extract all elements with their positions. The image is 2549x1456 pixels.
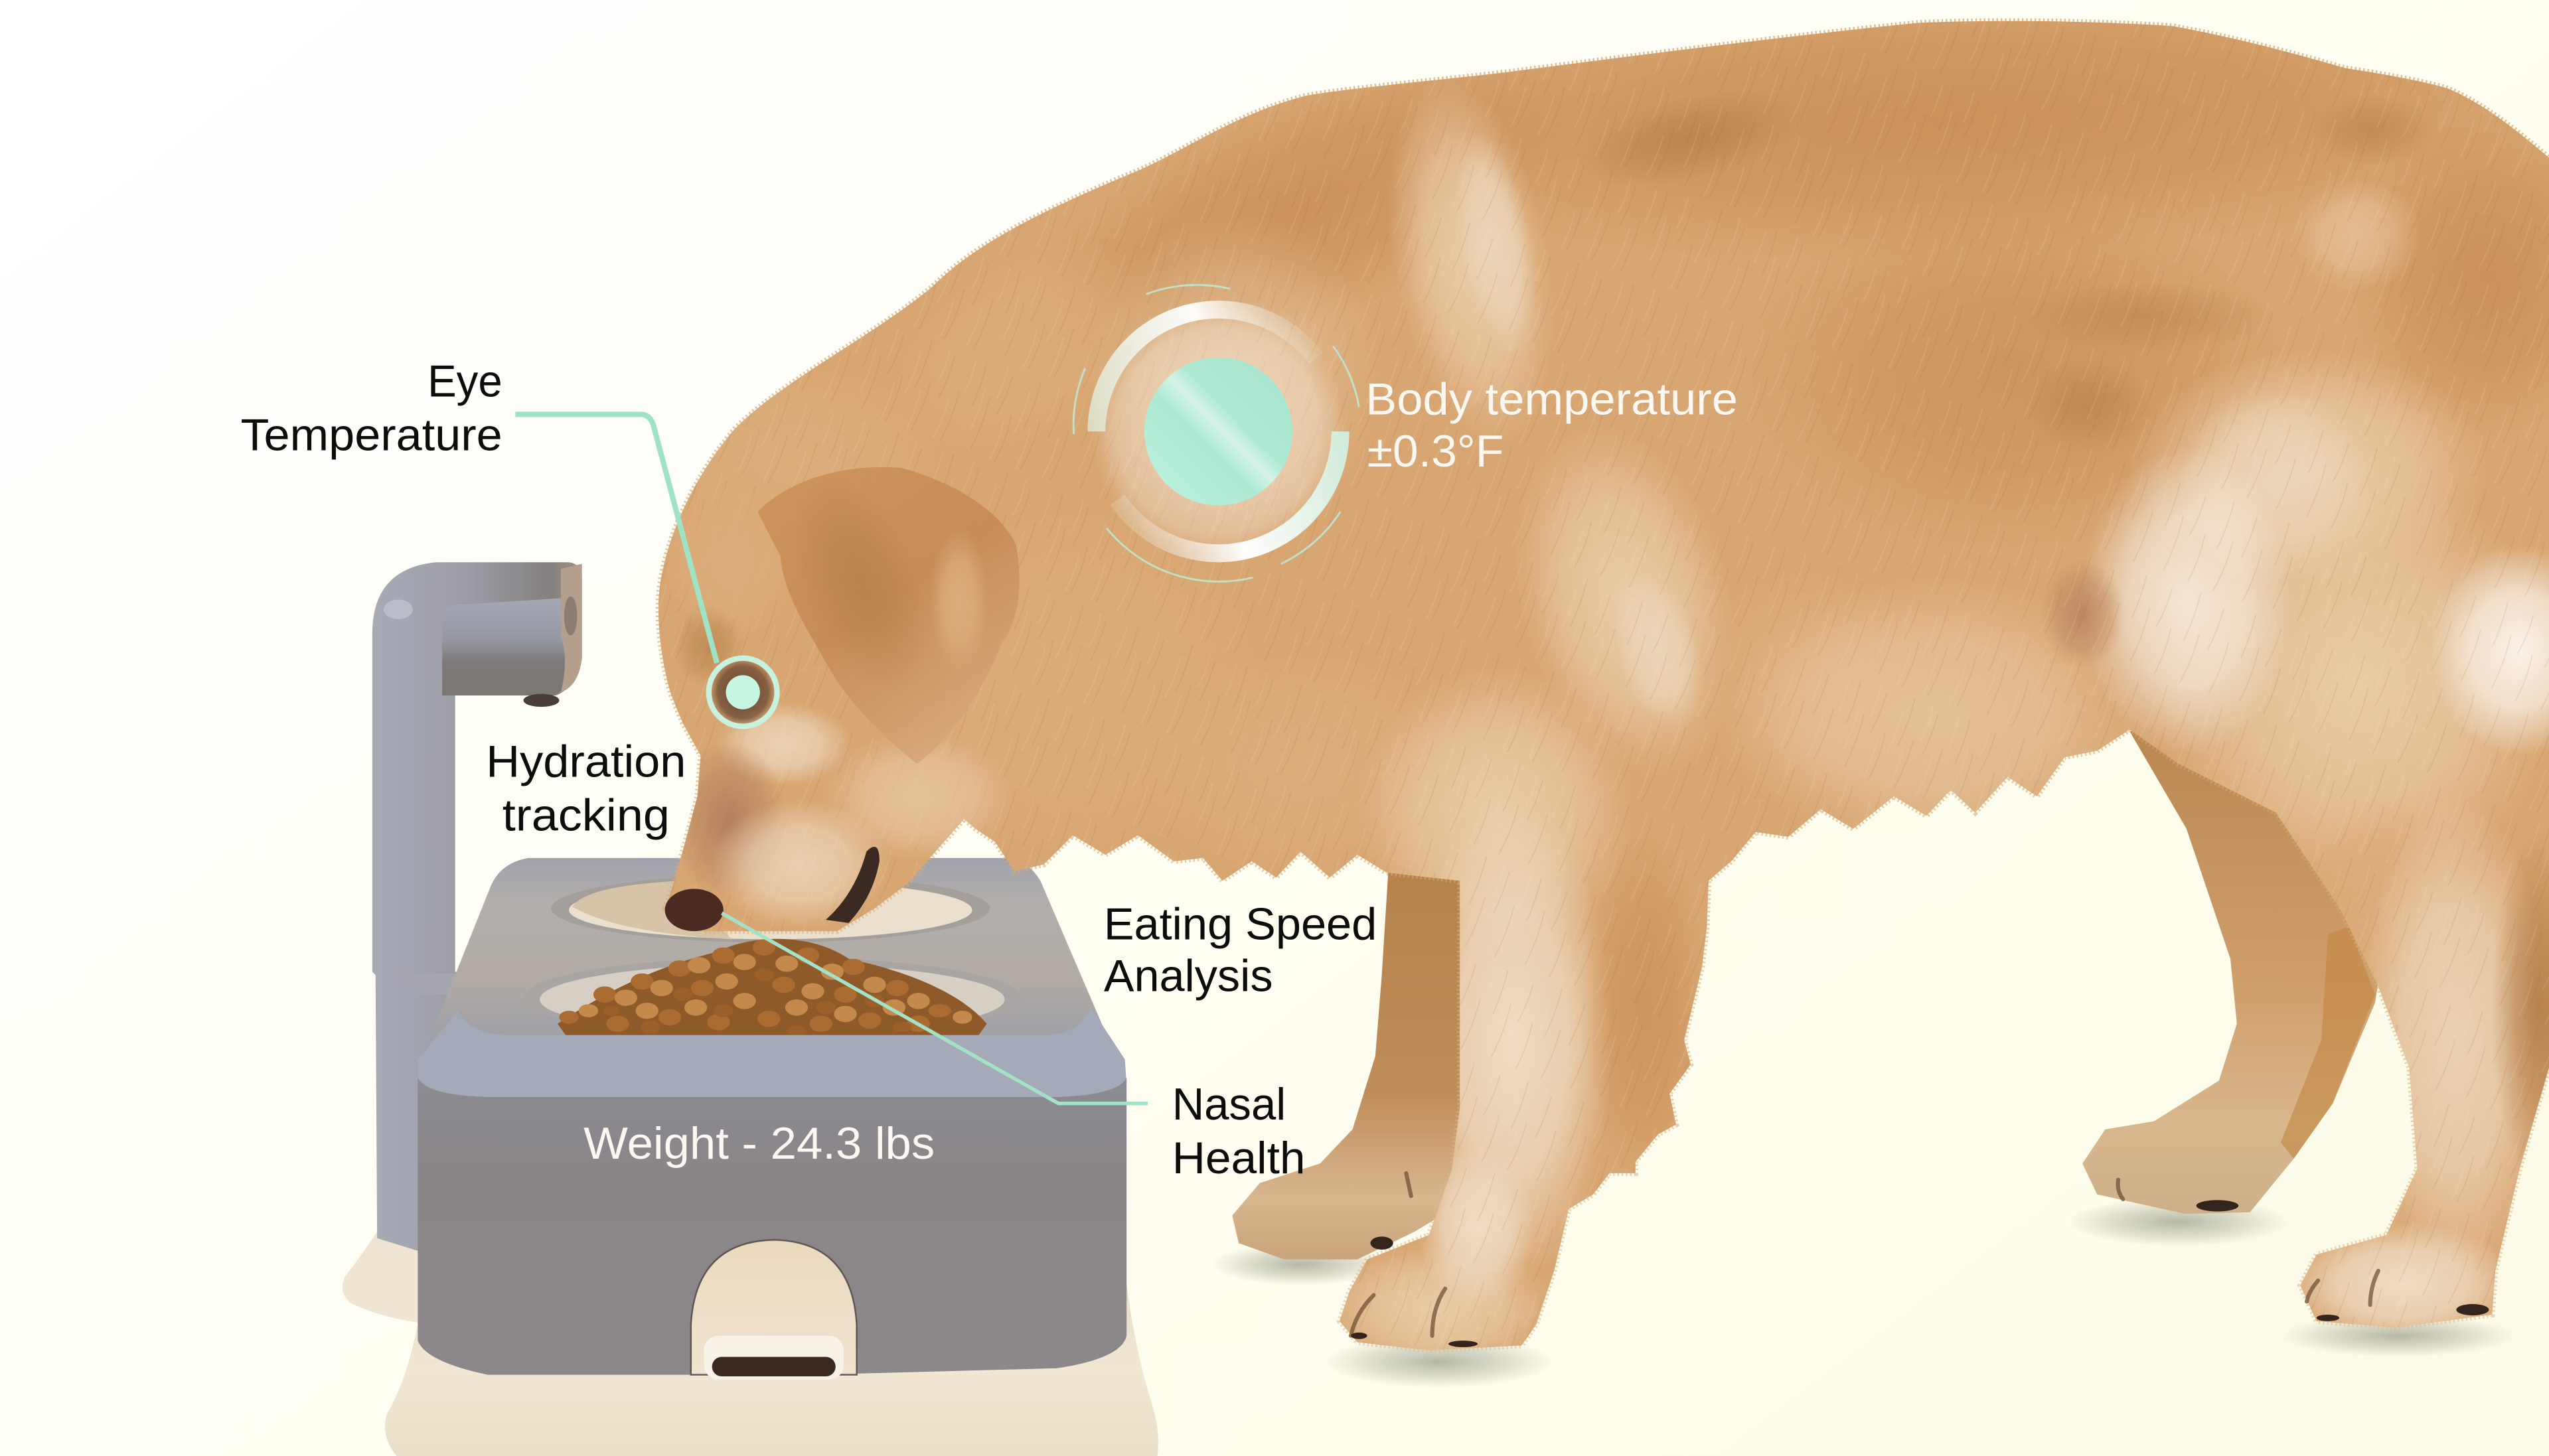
ear — [757, 458, 1019, 764]
forehead and muzzle — [682, 508, 1003, 924]
dog body — [634, 0, 2549, 1398]
kibble door — [691, 1240, 857, 1380]
leader line: nasal health — [722, 913, 1148, 1104]
front panel — [418, 1077, 1126, 1375]
far rear leg — [2082, 715, 2390, 1214]
mint disc — [1144, 358, 1292, 506]
label: eye temperature — [240, 356, 502, 460]
far rear leg orange edge — [2281, 926, 2375, 1159]
label: nasal health: Health — [1172, 1133, 1306, 1183]
kibble — [558, 939, 987, 1040]
label: eating speed analysis — [1104, 899, 1377, 1001]
front rim — [418, 1007, 1126, 1097]
label: eye temperature: Eye — [427, 356, 502, 406]
dog — [634, 0, 2549, 1398]
head — [663, 458, 1019, 931]
paw toes — [1351, 1173, 2378, 1336]
leader line: eye temperature — [515, 414, 717, 663]
eye sensor marker — [709, 658, 777, 727]
label: hydration tracking: Hydration — [486, 737, 686, 786]
claws — [1351, 1200, 2489, 1347]
thin arcs — [1073, 285, 1359, 581]
label: hydration tracking — [486, 737, 686, 840]
label: body temperature — [1365, 374, 1738, 476]
water tower tube — [372, 562, 582, 1251]
back base — [343, 1232, 420, 1323]
label: weight: Weight - 24.3 lbs — [583, 1119, 935, 1169]
label: body temperature: ±0.3°F — [1367, 427, 1504, 476]
label: nasal health: Nasal — [1172, 1080, 1286, 1129]
paw shadows — [1211, 1198, 2515, 1388]
nose — [665, 889, 724, 931]
label: eating speed analysis: Analysis — [1104, 952, 1273, 1001]
front bowl — [524, 957, 1021, 1039]
label: nasal health — [1172, 1080, 1306, 1183]
fur texture — [634, 0, 2549, 1398]
mouth — [826, 847, 880, 923]
back bowl — [551, 874, 990, 942]
tray top surface — [418, 858, 1126, 1080]
body temperature sensor graphic — [1073, 285, 1359, 581]
label: body temperature: Body temperature — [1365, 374, 1738, 424]
fur fringe outline — [658, 21, 2549, 1350]
label: eye temperature: Temperature — [240, 410, 502, 460]
label: eating speed analysis: Eating Speed — [1104, 899, 1377, 949]
thick arcs — [1097, 310, 1316, 431]
label: hydration tracking: tracking — [502, 790, 670, 840]
body tonal shading — [651, 0, 2549, 1373]
far front leg — [1232, 845, 1471, 1260]
eye — [707, 655, 779, 729]
smart feeder — [343, 562, 1158, 1456]
front base — [385, 1283, 1158, 1456]
